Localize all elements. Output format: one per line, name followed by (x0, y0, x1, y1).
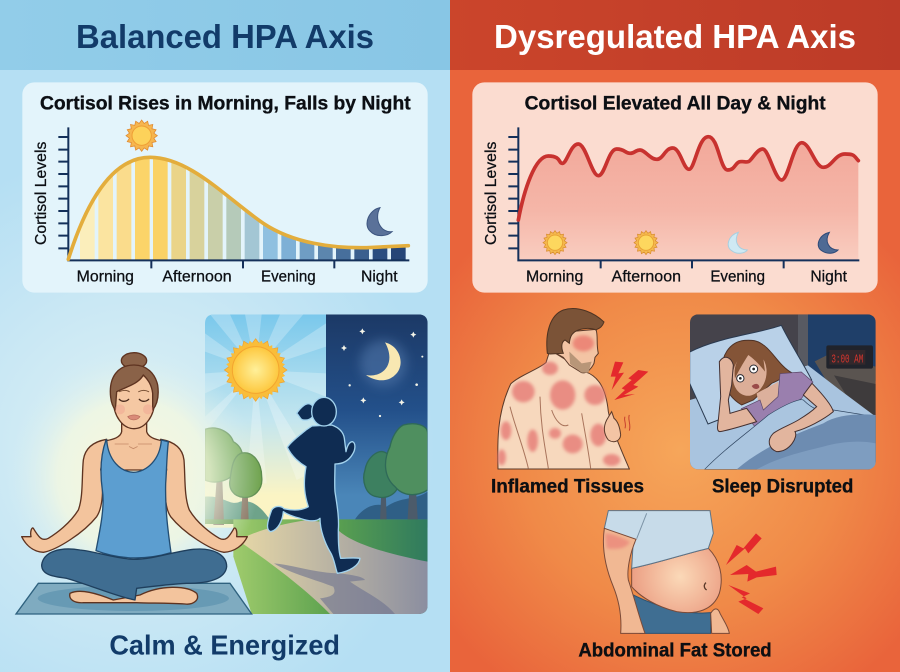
shirt (604, 511, 713, 568)
stars (341, 328, 423, 417)
runner silhouette (268, 397, 360, 573)
hair (721, 340, 792, 405)
chest and neck (101, 417, 167, 470)
arm (603, 528, 645, 633)
curve line: elevated cortisol (518, 137, 858, 220)
sun rays (205, 314, 326, 483)
caption: Inflamed Tissues: Inflamed Tissues (491, 476, 644, 497)
wide eyes (737, 365, 759, 389)
glow behind woman (7, 337, 260, 617)
shirt (741, 372, 813, 429)
illustration: inflamed back (497, 308, 648, 469)
pain lightning bolts (726, 533, 777, 614)
head and neck (550, 329, 598, 373)
jeans (633, 595, 711, 633)
legs (42, 549, 227, 600)
right hand (711, 609, 729, 633)
icon: moon (367, 208, 392, 236)
shake marks (625, 415, 630, 431)
blanket (705, 400, 876, 469)
caption: Abdominal Fat Stored: Abdominal Fat Stored (578, 641, 772, 662)
area under curve (518, 137, 858, 260)
y axis label: Cortisol Levels (483, 142, 500, 245)
chart card: cortisol elevated (472, 82, 878, 293)
muscle lines (510, 397, 591, 468)
x axis labels: Morning (77, 269, 134, 286)
scene: runner day to night (205, 314, 429, 614)
header band: balanced (0, 0, 450, 70)
icon: evening moon (728, 232, 747, 253)
x axis labels: Night (361, 269, 398, 286)
heading: Balanced HPA Axis: Balanced HPA Axis (76, 18, 374, 55)
inflamed patches (497, 362, 620, 466)
moon glow (360, 340, 407, 387)
yoga mat (16, 583, 252, 614)
header band: dysregulated (450, 0, 900, 70)
bed sheet (690, 365, 876, 469)
icon: big sun (224, 338, 288, 402)
runner shadow (274, 563, 395, 614)
panel: balanced HPA axis (0, 0, 450, 672)
arm over blanket (769, 383, 833, 452)
icon: night moon (818, 232, 838, 253)
axes and ticks (58, 127, 409, 268)
x axis labels: Evening (261, 269, 316, 286)
belly (632, 548, 721, 613)
hair bun (121, 353, 147, 369)
illustration: sleepless woman in bed (690, 314, 876, 469)
icon: afternoon sun (634, 231, 658, 255)
pillow (690, 325, 812, 424)
icon: sun (126, 120, 157, 151)
illustrations: symptoms (491, 308, 876, 662)
icon: crescent moon (366, 342, 401, 380)
meditating woman (22, 353, 247, 604)
x axis labels: Afternoon (162, 269, 232, 286)
trees: night (364, 424, 428, 524)
face (113, 371, 155, 429)
neck (757, 382, 778, 412)
x axis labels (77, 269, 398, 286)
tank top (96, 440, 171, 558)
face (732, 355, 767, 396)
feet (70, 587, 198, 604)
hair (547, 308, 604, 354)
illustration: abdominal fat (603, 511, 777, 633)
x axis labels: Night (810, 269, 848, 286)
caption: Sleep Disrupted: Sleep Disrupted (712, 476, 853, 497)
illustration group: calm and energized (7, 314, 429, 660)
bushes on horizon (205, 497, 270, 520)
x axis labels (526, 269, 848, 286)
gradient bars under curve (80, 159, 406, 260)
nightstand (815, 355, 876, 417)
facial features (115, 390, 152, 449)
x axis labels: Morning (526, 269, 583, 286)
chart card: cortisol rises and falls (22, 82, 428, 293)
y axis label: Cortisol Levels (33, 142, 50, 245)
caption: Calm and Energized: Calm & Energized (109, 629, 340, 660)
ground and path (233, 519, 428, 614)
arms (22, 439, 107, 552)
pain lightning bolts (611, 362, 648, 400)
hair (110, 365, 158, 410)
icon: morning sun (543, 231, 567, 255)
chart title: Cortisol Elevated All Day & Night (525, 93, 826, 114)
alarm clock: 3:00 AM (831, 352, 863, 366)
x axis labels: Afternoon (612, 269, 681, 286)
heading: Dysregulated HPA Axis: Dysregulated HPA Axis (494, 18, 856, 55)
trees: day (205, 427, 268, 525)
curve line: daily cortisol rhythm (68, 157, 408, 259)
panel: dysregulated HPA axis (450, 0, 900, 672)
torso and arm (498, 350, 629, 469)
axes and ticks (508, 127, 859, 268)
x axis labels: Evening (710, 269, 765, 286)
chart title: Cortisol Rises in Morning, Falls by Night (40, 93, 411, 114)
hand (604, 412, 621, 442)
alarm clock (826, 345, 873, 369)
raised arm (718, 357, 757, 432)
cheeks (115, 404, 153, 414)
